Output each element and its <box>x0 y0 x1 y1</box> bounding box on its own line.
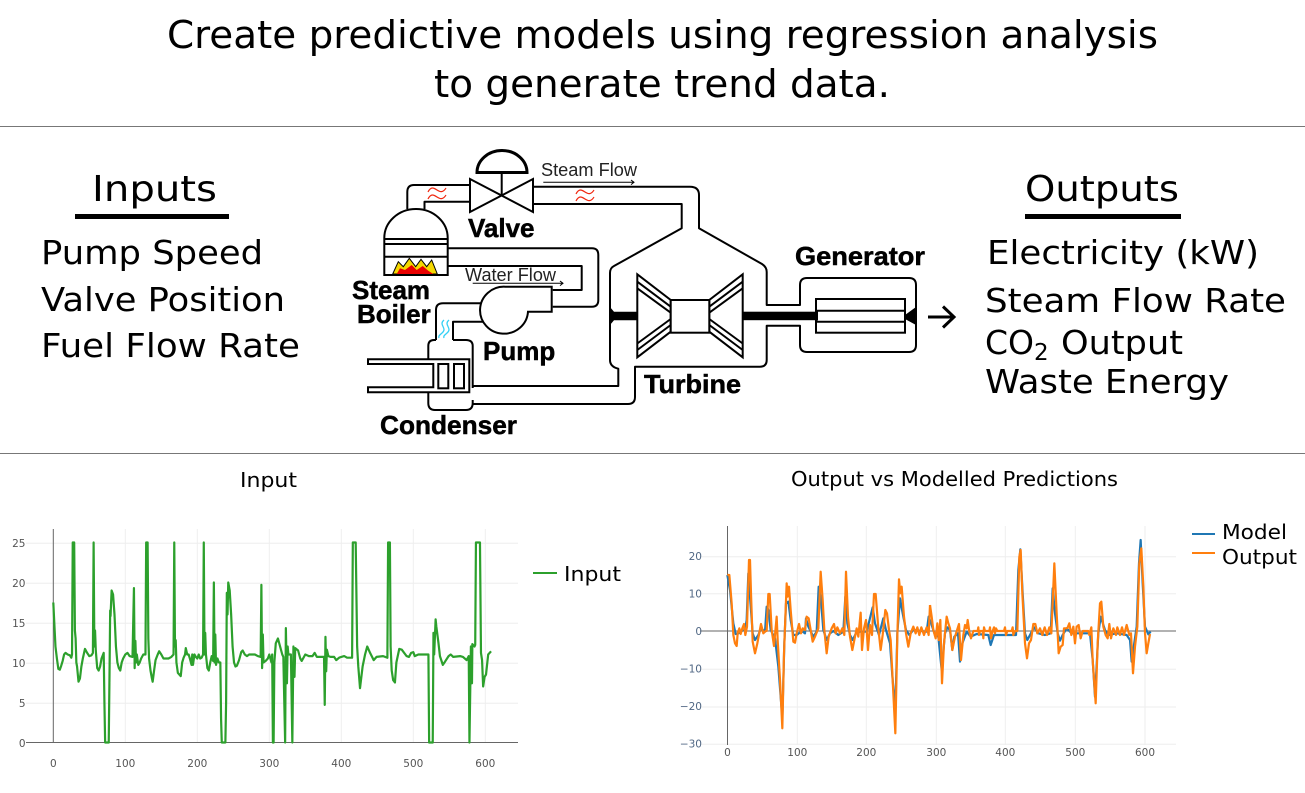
water pipes from pump to boiler <box>448 248 598 307</box>
text: output variables: Steam Flow Rate <box>985 281 1286 320</box>
y axis ticks: −30 <box>680 738 702 750</box>
x axis ticks: 400 <box>995 747 1015 759</box>
label: generator: Generator <box>795 241 925 271</box>
y axis ticks: 5 <box>19 698 26 710</box>
x axis ticks: 400 <box>331 758 351 770</box>
label: pump: Pump <box>483 336 555 366</box>
label: steam boiler: Boiler <box>357 299 431 329</box>
legend: input: Input <box>564 562 621 586</box>
label: steam flow: Steam Flow <box>541 160 638 180</box>
y axis ticks: 0 <box>19 738 26 750</box>
x axis ticks: 100 <box>115 758 135 770</box>
y axis ticks <box>680 551 702 750</box>
y axis ticks: −20 <box>680 701 702 713</box>
x axis ticks <box>724 747 1155 759</box>
label: steam boiler: Steam <box>352 275 430 305</box>
heading: inputs: Inputs <box>92 169 217 210</box>
legend: model and output <box>1192 520 1297 569</box>
title: Create predictive models using regression analysis <box>167 13 1158 57</box>
text: output variables: Output <box>1061 323 1183 362</box>
turbine shaft left <box>610 307 637 325</box>
x axis ticks <box>50 758 495 770</box>
x axis ticks: 500 <box>403 758 423 770</box>
y axis ticks: 20 <box>689 551 702 563</box>
panel: outputs list <box>985 169 1286 401</box>
valve <box>470 151 533 212</box>
label: steam boiler <box>352 275 431 329</box>
text: output variables: CO <box>985 323 1034 362</box>
flow arrows <box>473 180 634 286</box>
chart: output vs modelled predictions <box>680 467 1297 759</box>
pipe from condenser to pump <box>436 303 483 340</box>
output line series <box>727 548 1150 733</box>
x axis ticks: 600 <box>1135 747 1155 759</box>
panel: inputs list <box>41 169 300 365</box>
y axis ticks: 10 <box>689 588 702 600</box>
legend: model and output: Model <box>1222 520 1287 544</box>
title: to generate trend data. <box>434 62 890 106</box>
x axis ticks: 0 <box>50 758 57 770</box>
x axis ticks: 200 <box>187 758 207 770</box>
y axis ticks: 20 <box>12 578 26 590</box>
legend: input <box>533 562 621 586</box>
steam pipe and turbine casing and generator casing <box>473 187 916 404</box>
heading: outputs: Outputs <box>1025 169 1179 210</box>
legend: model and output: Output <box>1222 545 1297 569</box>
y axis ticks <box>12 538 26 750</box>
x axis ticks: 0 <box>724 747 731 759</box>
heading: inputs <box>75 169 229 219</box>
chart title: input: Input <box>240 468 297 492</box>
text: input variables: Pump Speed <box>41 233 263 272</box>
icon: steam waves <box>428 188 594 201</box>
steam pipe from boiler to valve <box>407 185 470 209</box>
y axis ticks: 25 <box>12 538 26 550</box>
generator <box>743 299 916 333</box>
text: input variables: Fuel Flow Rate <box>41 326 300 365</box>
condenser <box>368 340 473 410</box>
y axis ticks: 0 <box>695 626 702 638</box>
x axis ticks: 500 <box>1065 747 1085 759</box>
model line series <box>727 540 1151 718</box>
x axis ticks: 100 <box>787 747 807 759</box>
text: output variables: Waste Energy <box>985 362 1229 401</box>
text: output variables: Electricity (kW) <box>987 233 1259 272</box>
x axis ticks: 300 <box>926 747 946 759</box>
label: water flow: Water Flow <box>465 265 557 285</box>
pump <box>480 287 552 334</box>
chart: input <box>12 468 621 770</box>
label: valve: Valve <box>468 213 535 243</box>
label: turbine: Turbine <box>644 369 741 399</box>
text: input variables <box>41 233 300 365</box>
text: input variables: Valve Position <box>41 280 285 319</box>
power plant diagram <box>352 151 954 440</box>
arrow to outputs <box>928 306 954 328</box>
steam boiler <box>384 209 448 275</box>
title <box>167 13 1158 106</box>
y axis ticks: 15 <box>12 618 26 630</box>
text: output variables <box>985 233 1286 401</box>
x axis ticks: 600 <box>475 758 495 770</box>
label: condenser: Condenser <box>380 410 517 440</box>
chart title: output vs modelled predictions: Output vs Modelled Predictions <box>791 467 1118 491</box>
x axis ticks: 300 <box>259 758 279 770</box>
turbine <box>637 274 743 357</box>
x axis ticks: 200 <box>856 747 876 759</box>
y axis ticks: −10 <box>680 664 702 676</box>
icon: water vapour <box>439 320 449 338</box>
input line series <box>53 542 491 742</box>
y axis ticks: 10 <box>12 658 26 670</box>
text: output variables: 2 <box>1034 340 1049 366</box>
